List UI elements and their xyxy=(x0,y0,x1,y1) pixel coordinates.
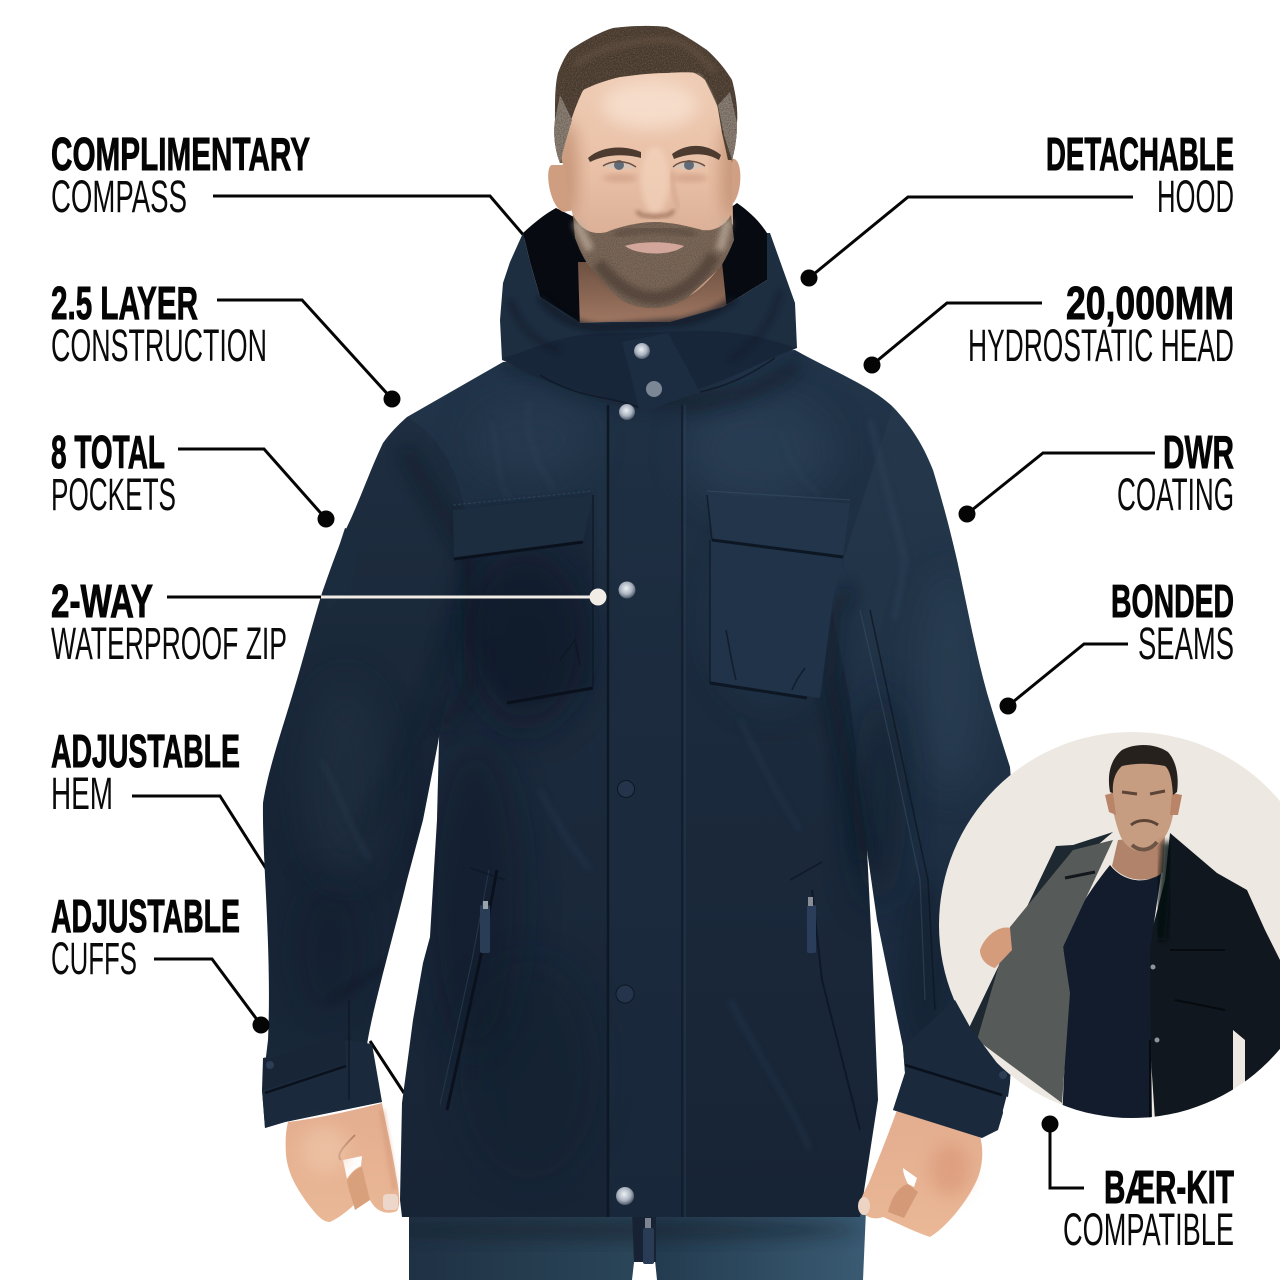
eyes xyxy=(602,160,708,182)
inset background xyxy=(939,732,1280,1118)
upper right pocket xyxy=(707,491,850,698)
inset grey lining xyxy=(977,840,1113,1103)
heading: ADJUSTABLE xyxy=(51,725,240,777)
leader with dot xyxy=(217,300,400,408)
callout: adjustable cuffs xyxy=(51,890,270,1034)
inset neck xyxy=(1112,835,1165,880)
leader line: compass, passing behind hood xyxy=(213,196,526,238)
callout: 2.5 layer construction xyxy=(51,277,400,408)
callout: baer-kit compatible xyxy=(1042,1116,1234,1255)
leader line: hem, passing behind sleeve xyxy=(132,796,404,1093)
leader with dot xyxy=(178,449,334,528)
face shading xyxy=(554,81,744,220)
hood xyxy=(500,233,797,410)
curled finger xyxy=(347,1167,370,1210)
head base behind face xyxy=(555,40,737,163)
subheading: POCKETS xyxy=(51,469,176,520)
heading: COMPLIMENTARY xyxy=(51,128,310,180)
beard xyxy=(573,215,734,308)
arm patch xyxy=(326,528,361,610)
heading: 8 TOTAL xyxy=(51,426,165,478)
leader with dot xyxy=(864,303,1042,374)
callout: DWR coating xyxy=(958,426,1234,522)
right hand xyxy=(858,1110,982,1237)
gap between fingers xyxy=(903,1168,917,1187)
jacket front tail and zip puller xyxy=(632,1212,656,1264)
curled finger xyxy=(888,1184,918,1218)
callout: 8 total pockets xyxy=(51,426,334,528)
front placket xyxy=(608,405,685,1217)
inset ears xyxy=(1105,793,1182,815)
lips xyxy=(625,242,684,254)
inset jacket left edge xyxy=(968,832,1113,1045)
eyebrows xyxy=(588,146,721,162)
subheading: CONSTRUCTION xyxy=(51,320,267,371)
inset shoulder shadow xyxy=(1160,842,1168,940)
neck xyxy=(578,262,728,330)
callout: adjustable hem xyxy=(51,725,240,819)
inset head xyxy=(1110,764,1173,852)
callout: bonded seams xyxy=(1000,575,1234,714)
inset buttons xyxy=(1150,964,1156,970)
snap buttons xyxy=(616,343,662,1205)
right cuff overlapping inset xyxy=(893,1000,1010,1138)
left hip pocket with zip xyxy=(440,868,505,1110)
model wearing navy jacket xyxy=(262,26,1020,1280)
right hip pocket with zip xyxy=(790,862,860,1130)
ears xyxy=(548,159,740,212)
leader with light dot over jacket xyxy=(167,588,606,606)
inset t-shirt xyxy=(1062,865,1162,1120)
inset face features xyxy=(1122,791,1165,825)
callout: 20,000mm hydrostatic head xyxy=(864,277,1234,374)
leader with dot xyxy=(958,453,1155,522)
collar flap xyxy=(622,333,700,413)
left hand xyxy=(286,1103,399,1222)
callout: 2-way waterproof zip xyxy=(51,575,606,669)
subheading: CUFFS xyxy=(51,933,137,984)
subheading: COMPASS xyxy=(51,171,187,222)
leader with dot xyxy=(800,197,1133,286)
right sleeve xyxy=(830,407,1020,1137)
jacket light and shadow folds xyxy=(294,350,982,1180)
gap between fingers xyxy=(343,1156,362,1179)
heading: 2.5 LAYER xyxy=(51,277,198,329)
hood interior xyxy=(523,203,767,330)
upper left pocket xyxy=(453,491,593,703)
inset circle: jacket lining photo xyxy=(939,732,1280,1120)
heading: DWR xyxy=(1163,426,1234,478)
hair xyxy=(554,26,737,163)
inset jacket details xyxy=(1150,950,1225,1120)
leader with dot xyxy=(1000,644,1128,714)
inset hair xyxy=(1109,745,1178,795)
leader with dot xyxy=(1042,1116,1084,1188)
heading: 2-WAY xyxy=(51,575,153,627)
subheading: WATERPROOF ZIP xyxy=(51,618,287,669)
left sleeve xyxy=(262,417,470,1128)
jacket hem shadow xyxy=(404,1203,860,1213)
nose xyxy=(637,170,678,217)
callout: detachable hood xyxy=(800,128,1234,286)
subheading: HEM xyxy=(51,768,113,819)
heading: ADJUSTABLE xyxy=(51,890,240,942)
heading: 20,000MM xyxy=(1066,277,1234,329)
inset lining zip xyxy=(1065,872,1095,878)
jacket body xyxy=(400,350,893,1217)
callout: complimentary compass xyxy=(51,128,310,222)
face xyxy=(560,66,733,307)
inset hand xyxy=(980,927,1012,968)
jeans xyxy=(409,1213,866,1280)
leader with dot xyxy=(154,959,270,1034)
inset jacket outer right xyxy=(1147,833,1280,1120)
left cuff xyxy=(262,1000,382,1128)
